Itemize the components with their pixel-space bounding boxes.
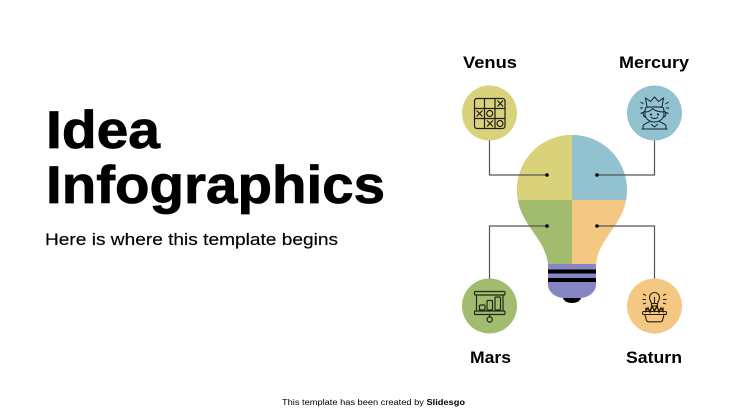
- footer credit: This template has been created by Slidesgo: [282, 398, 465, 407]
- title: Idea: [46, 101, 161, 160]
- label: Mercury: Mercury: [619, 54, 690, 72]
- title: Infographics: [46, 156, 385, 215]
- label: Venus: Venus: [463, 54, 517, 72]
- connector: Mercury: [595, 140, 654, 177]
- connector: Venus: [490, 140, 549, 177]
- connector: Saturn: [595, 224, 654, 279]
- light bulb: [517, 135, 627, 303]
- title: [46, 101, 385, 215]
- connector: Mars: [490, 224, 549, 279]
- subtitle: Here is where this template begins: [45, 230, 338, 249]
- icon: Saturn bulb plant pot: [627, 278, 682, 334]
- icon: Mars presentation board: [462, 278, 517, 334]
- label: Saturn: Saturn: [626, 349, 682, 367]
- label: Mars: Mars: [470, 349, 511, 367]
- icon: Mercury crowned person: [627, 86, 682, 140]
- icon: Venus tic-tac-toe: [462, 86, 517, 140]
